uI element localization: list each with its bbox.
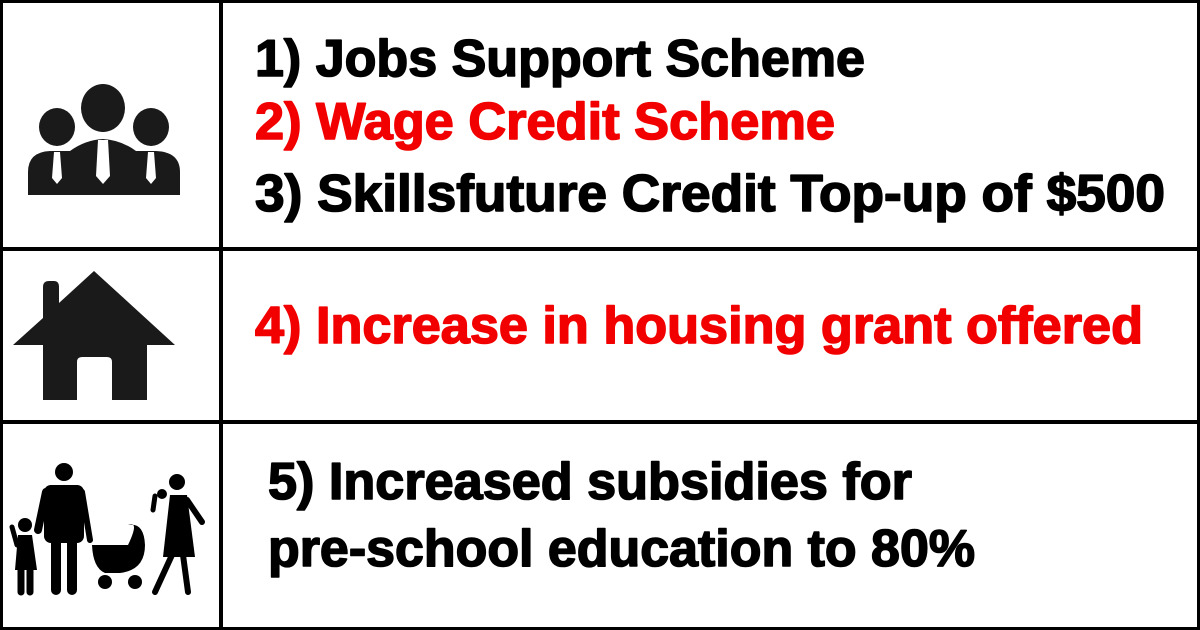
text: item 4: 4) Increase in housing grant offered bbox=[255, 297, 1143, 355]
icon: business people bbox=[28, 84, 180, 195]
text: item 3: 3) Skillsfuture Credit Top-up of $500 bbox=[255, 165, 1165, 223]
icon: family bbox=[12, 463, 202, 592]
text: item 2: 2) Wage Credit Scheme bbox=[255, 93, 835, 151]
text: item 5 bbox=[268, 453, 975, 578]
icon: house bbox=[13, 271, 175, 400]
text: item 1: 1) Jobs Support Scheme bbox=[255, 30, 865, 88]
text: item 5: pre-school education to 80% bbox=[268, 520, 975, 578]
text: item 5: 5) Increased subsidies for bbox=[268, 453, 912, 511]
